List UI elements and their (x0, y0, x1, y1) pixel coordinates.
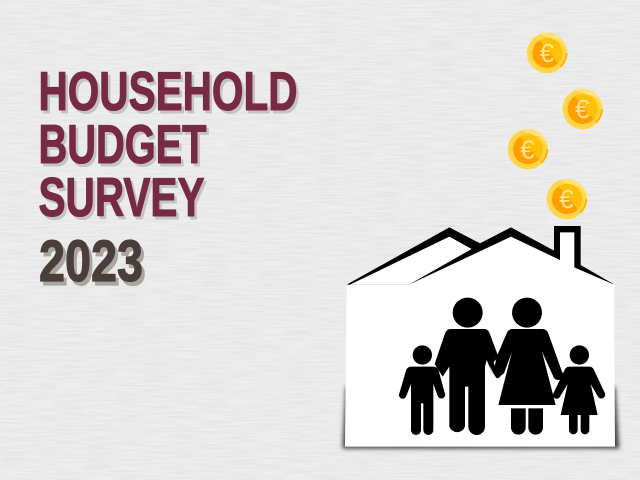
family (399, 298, 605, 435)
house body (345, 232, 615, 447)
icon: euro coins (508, 33, 603, 219)
heading line: SURVEY: SURVEY (41, 169, 207, 231)
icon: house with family (342, 226, 619, 449)
house shadow (342, 387, 619, 449)
back house gable (350, 237, 472, 285)
icon: coin 4 (547, 179, 587, 219)
woman (493, 298, 563, 435)
heading line: BUDGET: BUDGET (41, 116, 209, 178)
year: 2023 (39, 229, 143, 294)
roof outline (347, 226, 613, 290)
year: 2023 (42, 233, 146, 298)
icon: coin 1 (527, 33, 568, 73)
boy (399, 345, 445, 435)
girl (553, 345, 605, 434)
icon: coin 3 (508, 129, 548, 170)
heading line: HOUSEHOLD: HOUSEHOLD (38, 60, 298, 122)
title (38, 60, 300, 231)
heading line: BUDGET: BUDGET (38, 113, 206, 175)
icon: coin 2 (562, 89, 603, 129)
man (435, 298, 512, 435)
heading line: SURVEY: SURVEY (38, 166, 204, 228)
heading line: HOUSEHOLD: HOUSEHOLD (41, 63, 300, 125)
